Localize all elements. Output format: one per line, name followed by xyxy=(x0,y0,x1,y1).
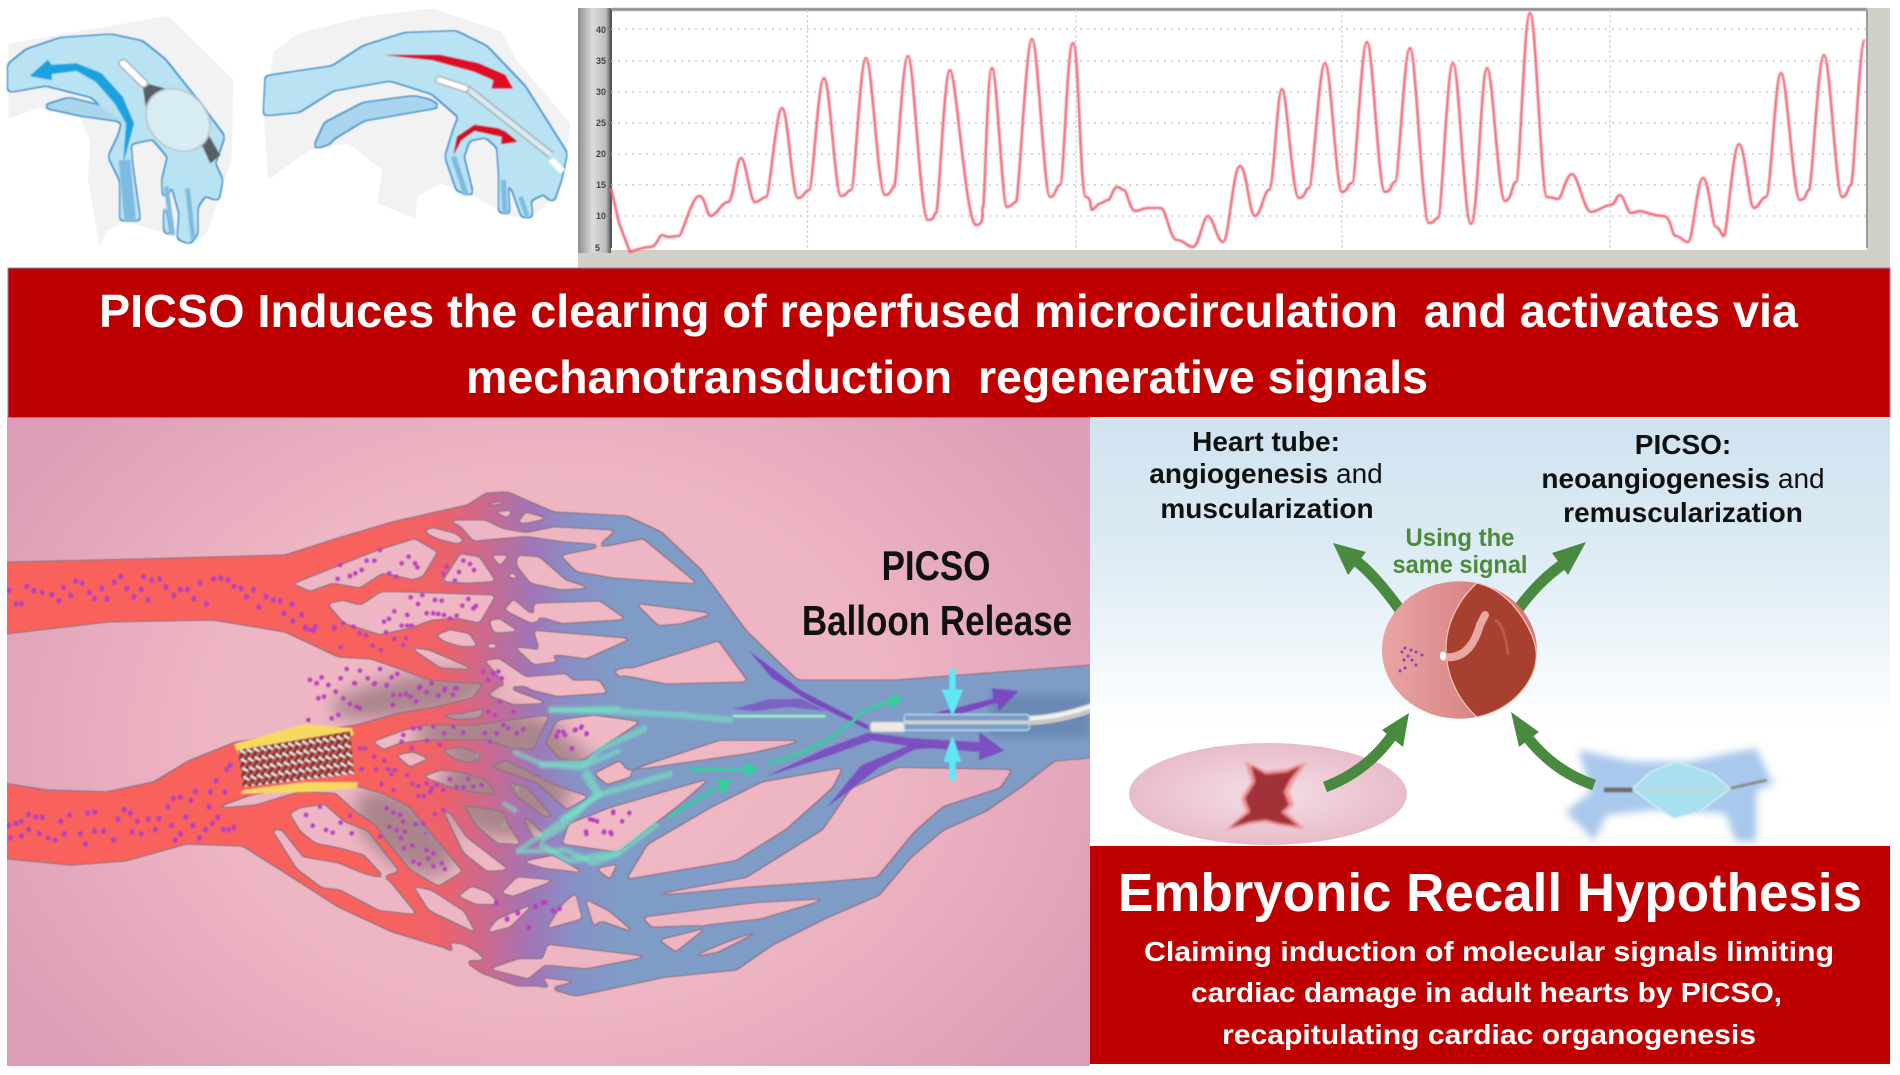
green arrowheads xyxy=(1333,542,1586,747)
label: PICSO outcome: PICSO: xyxy=(1635,429,1731,460)
y axis labels xyxy=(595,25,606,253)
panel: Embryonic Recall Hypothesis xyxy=(1090,846,1890,1064)
vessel tree xyxy=(0,492,1120,996)
vein darkening near catheter xyxy=(990,695,1090,737)
chart grid lines xyxy=(611,10,1867,250)
green flow arrows xyxy=(669,702,892,817)
label: heart tube: muscularization xyxy=(1160,493,1374,524)
label: PICSO Balloon Release xyxy=(804,551,1071,636)
label: using the same signal: Using the xyxy=(1406,524,1515,552)
headline line 1: PICSO Induces the clearing of reperfused microcirculation and activates via xyxy=(99,285,1798,337)
y axis labels: 5 xyxy=(595,243,600,253)
label: heart tube: Heart tube: xyxy=(1192,426,1340,457)
released debris stream (teal) xyxy=(427,708,733,863)
y axis labels: 35 xyxy=(596,56,606,66)
box title: Embryonic Recall Hypothesis xyxy=(1118,863,1862,923)
y axis labels: 25 xyxy=(596,118,606,128)
label: using the same signal: same signal xyxy=(1392,551,1528,579)
box body text: Claiming induction of molecular signals limiting xyxy=(1144,936,1834,967)
cyan compression arrows xyxy=(942,669,963,781)
panel: PICSO balloon deflated vein diagram xyxy=(264,8,570,218)
banner: headline xyxy=(8,268,1890,418)
green arrows xyxy=(1325,560,1594,787)
label: using the same signal xyxy=(1392,524,1528,579)
y axis labels: 15 xyxy=(596,180,606,190)
catheter shaft and balloon xyxy=(1029,708,1092,720)
label: heart tube: angiogenesis and xyxy=(1149,458,1383,489)
tissue shadows xyxy=(328,661,589,893)
label: PICSO outcome: neoangiogenesis and xyxy=(1541,463,1825,494)
label: PICSO outcome xyxy=(1541,429,1825,528)
headline line 2: mechanotransduction regenerative signals xyxy=(466,351,1428,403)
panel: microcirculation vessel network xyxy=(0,418,1120,1066)
box body text: cardiac damage in adult hearts by PICSO, xyxy=(1191,977,1782,1008)
chart: coronary sinus pressure trace xyxy=(578,8,1890,268)
y axis labels: 40 xyxy=(596,25,606,35)
y axis labels: 30 xyxy=(596,87,606,97)
label: PICSO Balloon Release: Balloon Release xyxy=(802,598,1072,645)
flow arrows and catheter xyxy=(669,651,1092,817)
box body text xyxy=(1144,936,1834,1050)
label: PICSO outcome: remuscularization xyxy=(1563,497,1803,528)
purple backflow arrows xyxy=(733,651,1019,807)
chart frame xyxy=(578,8,1890,268)
y axis labels: 10 xyxy=(596,211,606,221)
red blood cells xyxy=(9,550,629,927)
y axis labels: 20 xyxy=(596,149,606,159)
panel background xyxy=(7,418,1090,1066)
cross-section heart xyxy=(1382,581,1537,719)
box body text: recapitulating cardiac organogenesis xyxy=(1222,1019,1756,1050)
oval with embryonic heart tube xyxy=(1129,743,1407,845)
panel: occluded vein diagram xyxy=(8,16,233,247)
label: heart tube xyxy=(1149,426,1383,524)
panel background xyxy=(1090,417,1890,846)
PICSO balloon in vessel xyxy=(1565,748,1782,842)
label: PICSO Balloon Release: PICSO xyxy=(882,543,990,590)
panel: embryonic recall diagram xyxy=(1090,417,1890,846)
stent with plaque xyxy=(234,724,358,794)
pressure curve xyxy=(611,13,1865,252)
